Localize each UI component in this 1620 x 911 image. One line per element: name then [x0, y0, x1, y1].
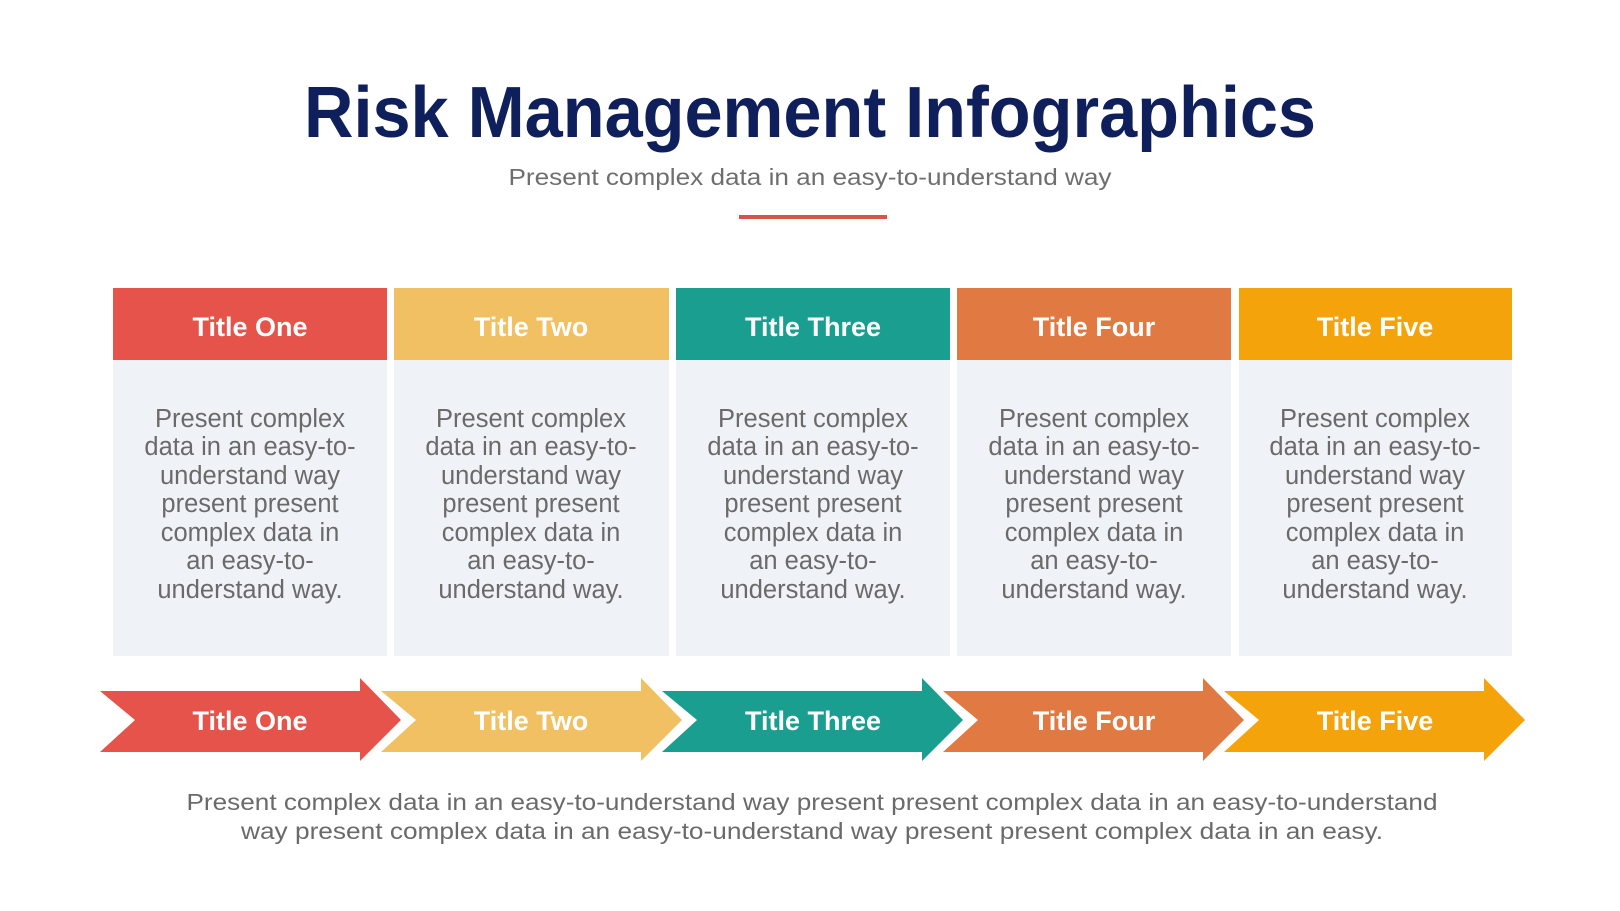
- panel: title two: Title Two: [474, 312, 588, 342]
- panel: title four: data in an easy-to-: [988, 433, 1200, 461]
- title: Risk Management Infographics: [304, 73, 1316, 153]
- accent underline: [739, 215, 887, 219]
- panel: title two: an easy-to-: [467, 547, 595, 575]
- panel: title three: complex data in: [724, 519, 902, 547]
- panel: title three: present present: [724, 490, 902, 518]
- footer text: Present complex data in an easy-to-understand way present present complex data in an easy-to-understand: [186, 789, 1438, 815]
- panel: title three: Present complex: [718, 405, 908, 433]
- panel: title four: understand way: [1004, 462, 1184, 490]
- arrow: title three: Title Three: [745, 706, 881, 736]
- subtitle: Present complex data in an easy-to-understand way: [508, 164, 1112, 190]
- panel: title four: understand way.: [1001, 576, 1187, 604]
- panel: title one: Title One: [192, 312, 308, 342]
- arrow: title one: [100, 678, 401, 761]
- panel: title four: [957, 288, 1231, 656]
- arrow: title two: Title Two: [474, 706, 588, 736]
- footer text: way present complex data in an easy-to-understand way present present complex data in an easy.: [240, 818, 1383, 844]
- panel: title five: complex data in: [1286, 519, 1464, 547]
- panel: title one: understand way.: [157, 576, 343, 604]
- arrow: title four: [943, 678, 1244, 761]
- panel: title three: an easy-to-: [749, 547, 877, 575]
- footer text: [186, 789, 1438, 844]
- panel: title four: an easy-to-: [1030, 547, 1158, 575]
- panel: title five: [1239, 288, 1512, 656]
- panel: title five: present present: [1286, 490, 1464, 518]
- panel: title one: complex data in: [161, 519, 339, 547]
- arrow: title one: Title One: [192, 706, 308, 736]
- arrow: title two: [381, 678, 682, 761]
- panel: title three: understand way: [723, 462, 903, 490]
- arrow: title five: Title Five: [1317, 706, 1433, 736]
- arrow: title three: [662, 678, 963, 761]
- panel: title five: Title Five: [1317, 312, 1433, 342]
- panel: title three: [676, 288, 950, 656]
- panel: title five: Present complex: [1280, 405, 1470, 433]
- panel: title four: Present complex: [999, 405, 1189, 433]
- panel: title one: data in an easy-to-: [144, 433, 356, 461]
- panel: title two: [394, 288, 669, 656]
- panel: title one: Present complex: [155, 405, 345, 433]
- arrow: title five: [1224, 678, 1525, 761]
- panel: title five: understand way.: [1282, 576, 1468, 604]
- panel: title one: present present: [161, 490, 339, 518]
- panel: title four: complex data in: [1005, 519, 1183, 547]
- panel: title three: understand way.: [720, 576, 906, 604]
- panel: title three: data in an easy-to-: [707, 433, 919, 461]
- panel: title five: an easy-to-: [1311, 547, 1439, 575]
- panel: title four: present present: [1005, 490, 1183, 518]
- panel: title five: data in an easy-to-: [1269, 433, 1481, 461]
- panel: title one: [113, 288, 387, 656]
- panel: title three: Title Three: [745, 312, 881, 342]
- arrow: title four: Title Four: [1033, 706, 1156, 736]
- panel: title two: understand way.: [438, 576, 624, 604]
- panel: title two: present present: [442, 490, 620, 518]
- panel: title two: understand way: [441, 462, 621, 490]
- panel: title one: an easy-to-: [186, 547, 314, 575]
- panel: title two: data in an easy-to-: [425, 433, 637, 461]
- panel: title one: understand way: [160, 462, 340, 490]
- panel: title two: complex data in: [442, 519, 620, 547]
- panel: title two: Present complex: [436, 405, 626, 433]
- panel: title four: Title Four: [1033, 312, 1156, 342]
- panel: title five: understand way: [1285, 462, 1465, 490]
